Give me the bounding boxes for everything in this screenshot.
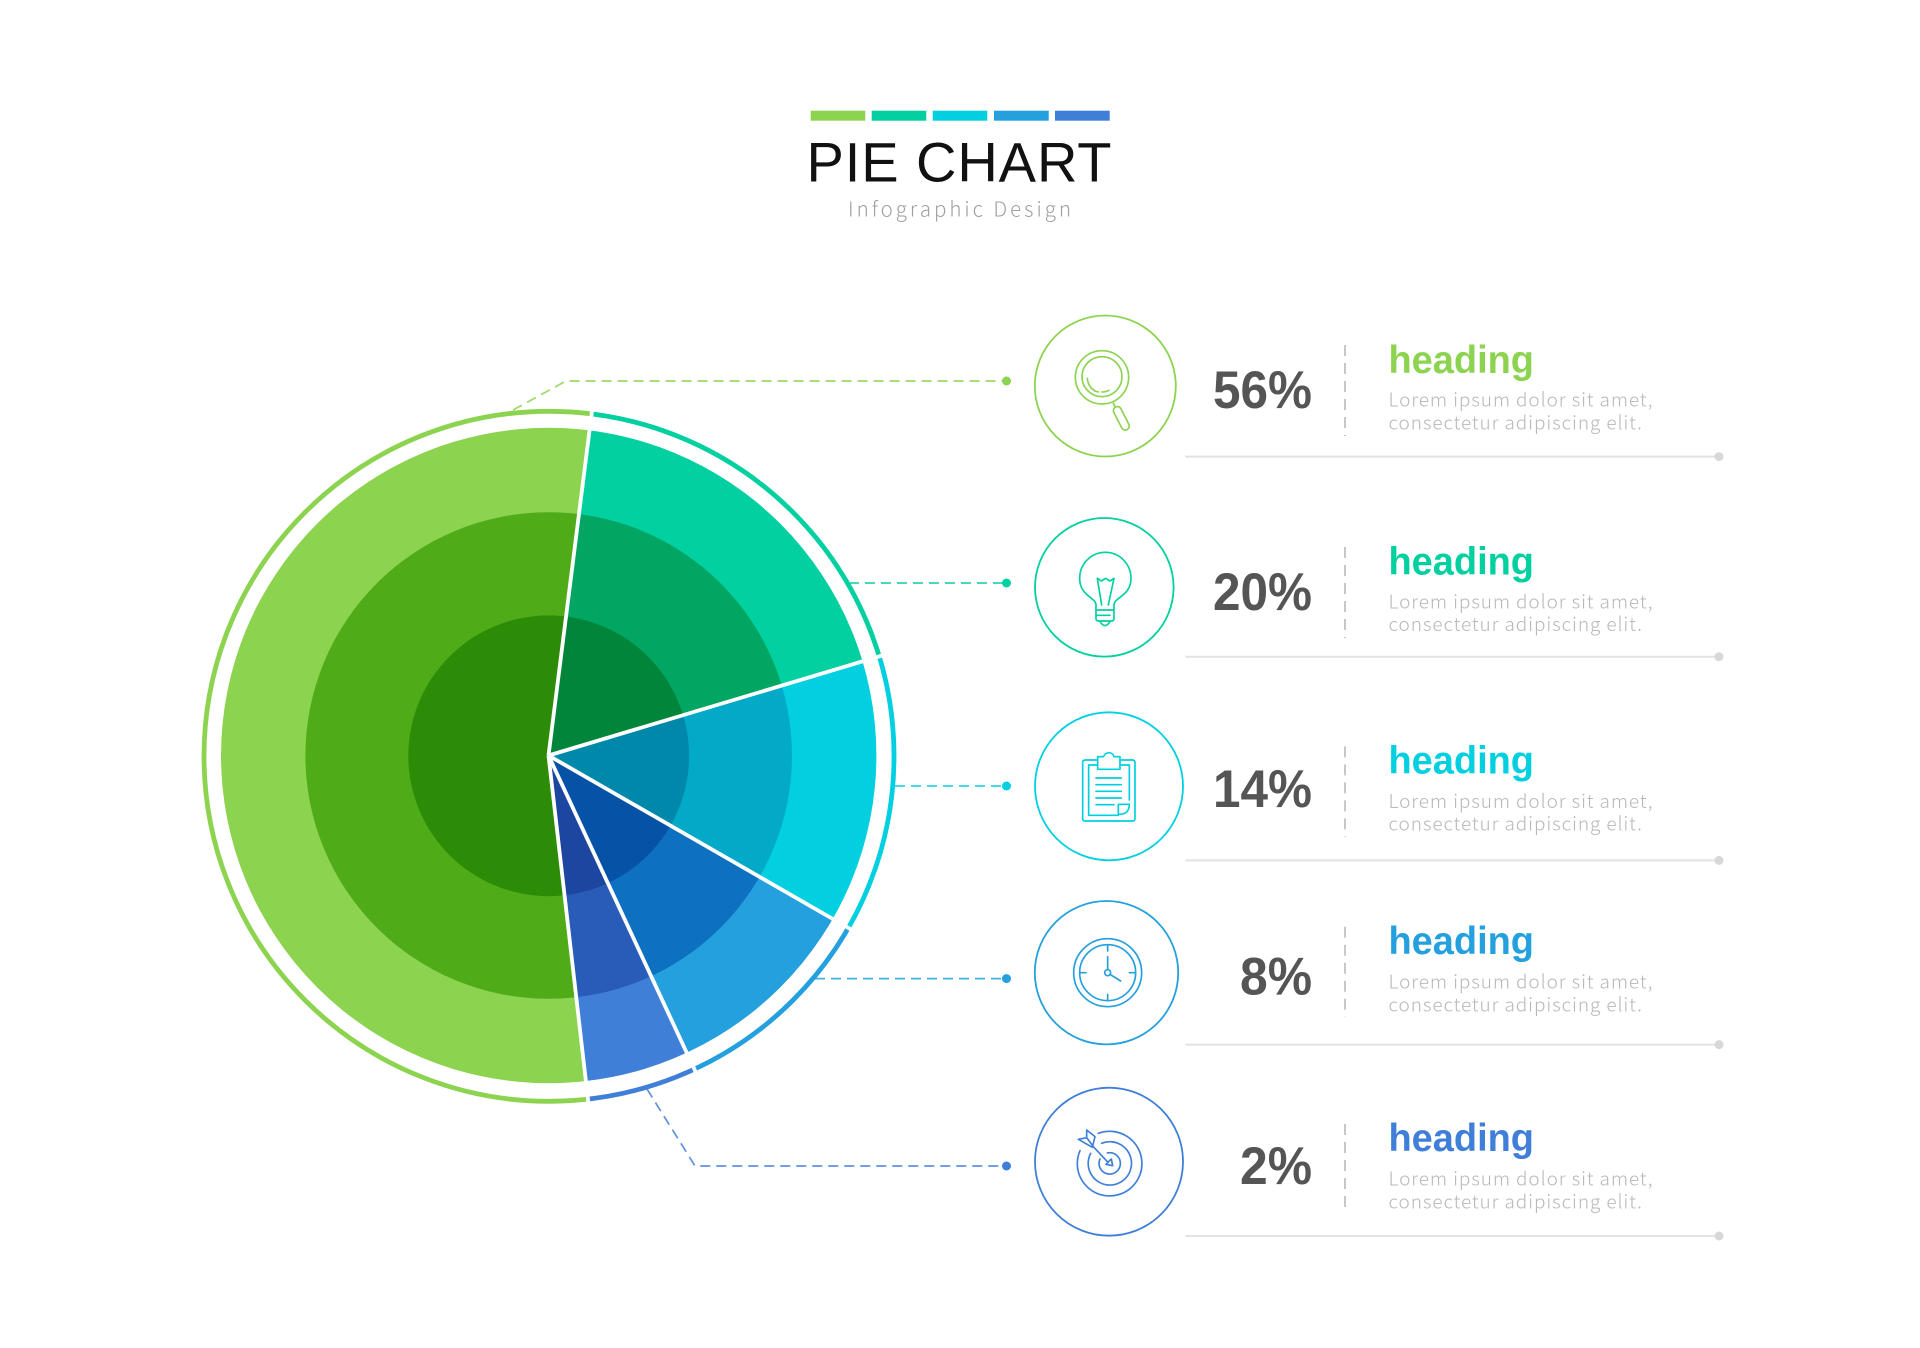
wedge: 2%	[552, 766, 685, 1081]
description: Lorem ipsum dolor sit amet,	[1388, 1165, 1652, 1192]
description: consectetur adipiscing elit.	[1388, 610, 1642, 637]
heading: heading	[1388, 540, 1534, 583]
percentage: 2%	[1240, 1137, 1312, 1196]
description: consectetur adipiscing elit.	[1388, 1188, 1642, 1215]
icon: clipboard	[1083, 753, 1135, 821]
title: PIE CHART	[806, 131, 1112, 194]
connector: 14%	[895, 782, 1011, 790]
outer ring	[204, 411, 894, 1101]
icon circle	[1035, 712, 1183, 860]
percentage: 8%	[1240, 948, 1312, 1007]
description: Lorem ipsum dolor sit amet,	[1388, 968, 1652, 995]
description: consectetur adipiscing elit.	[1388, 810, 1642, 837]
panel: row 20%	[1035, 518, 1724, 661]
icon circle	[1035, 901, 1178, 1044]
icon: magnifying glass	[1075, 351, 1131, 431]
subtitle: Infographic Design	[848, 193, 1071, 223]
description: Lorem ipsum dolor sit amet,	[1388, 587, 1652, 614]
wedge: 8%	[552, 760, 832, 1052]
icon: clock	[1074, 939, 1142, 1007]
description	[1388, 386, 1652, 435]
wedge: 14%	[553, 663, 876, 918]
description	[1388, 787, 1652, 837]
percentage: 14%	[1213, 760, 1312, 819]
icon: light bulb	[1080, 552, 1131, 625]
pie chart	[204, 395, 897, 1117]
icon circle	[1035, 316, 1176, 456]
heading: heading	[1388, 1117, 1534, 1160]
description: Lorem ipsum dolor sit amet,	[1388, 386, 1652, 413]
panel: row 8%	[1035, 901, 1724, 1049]
description	[1388, 968, 1652, 1017]
wedge: 56%	[221, 428, 588, 1084]
icon circle	[1035, 1088, 1183, 1236]
icon circle	[1035, 518, 1174, 657]
connector: 8%	[815, 974, 1011, 983]
colour bars	[811, 111, 1110, 121]
heading: heading	[1388, 339, 1534, 382]
description: consectetur adipiscing elit.	[1388, 990, 1642, 1017]
title block	[806, 111, 1112, 223]
percentage: 20%	[1213, 563, 1312, 622]
description	[1388, 587, 1652, 637]
description: consectetur adipiscing elit.	[1388, 408, 1642, 435]
wedge: 20%	[550, 430, 862, 753]
panel: row 2%	[1035, 1088, 1724, 1240]
connector: 56%	[513, 376, 1011, 410]
panel: row 56%	[1035, 316, 1724, 461]
connector: 20%	[849, 578, 1011, 588]
percentage: 56%	[1213, 361, 1312, 420]
description	[1388, 1165, 1652, 1215]
heading: heading	[1388, 740, 1534, 782]
panel: row 14%	[1035, 712, 1724, 865]
icon: target with arrow	[1077, 1130, 1142, 1196]
description: Lorem ipsum dolor sit amet,	[1388, 787, 1652, 814]
connector: 2%	[647, 1089, 1011, 1170]
heading: heading	[1388, 920, 1534, 963]
